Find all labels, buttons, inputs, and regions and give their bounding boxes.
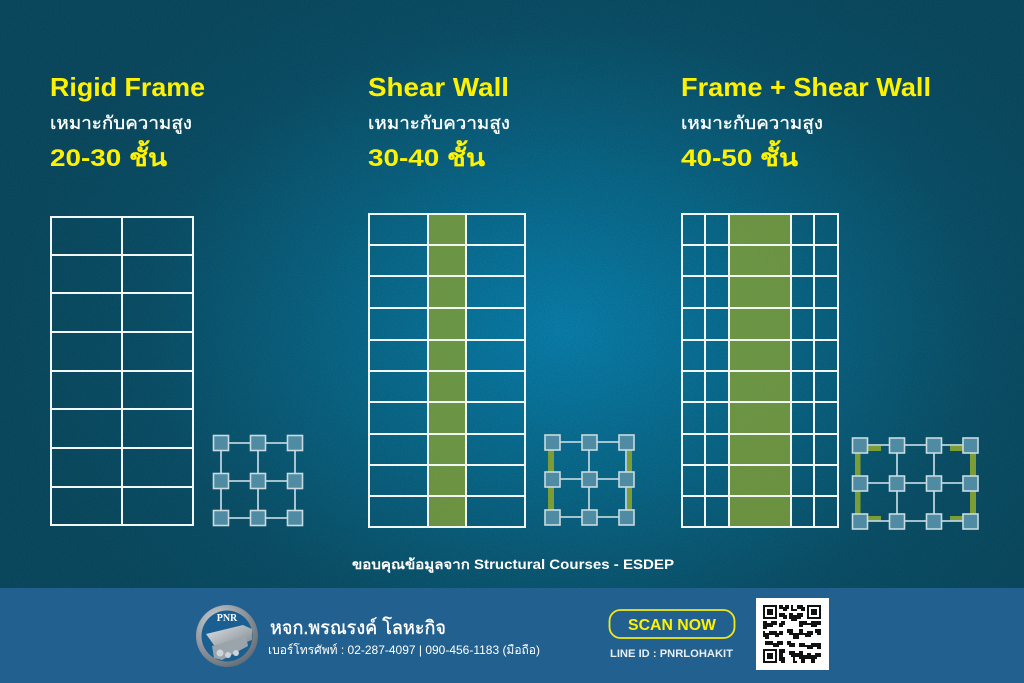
text: 20-30 floors: 20-30 ชั้น — [50, 139, 168, 172]
elevation grid: frame plus shear wall — [682, 214, 838, 527]
line id: LINE ID : PNRLOHAKIT — [610, 648, 733, 660]
icon: PNR logo — [196, 605, 258, 667]
panel: shear wall — [368, 72, 634, 527]
shear wall core — [428, 214, 466, 527]
elevation grid: rigid frame — [51, 217, 193, 525]
icon: PNR logo: PNR — [217, 613, 238, 624]
panel: frame plus shear wall — [681, 72, 978, 529]
plan: rigid frame — [214, 436, 302, 526]
text: suitable height label: เหมาะกับความสูง — [368, 113, 510, 134]
credit line: ขอบคุณข้อมูลจาก Structural Courses - ESDEP — [352, 557, 674, 573]
text: suitable height label: เหมาะกับความสูง — [681, 113, 823, 134]
text: 40-50 floors: 40-50 ชั้น — [681, 139, 799, 172]
button: scan now: SCAN NOW — [628, 617, 717, 634]
phone numbers: เบอร์โทรศัพท์ : 02-287-4097 | 090-456-1183 (มือถือ) — [268, 643, 540, 657]
text: suitable height label: เหมาะกับความสูง — [50, 113, 192, 134]
heading: Frame + Shear Wall: Frame + Shear Wall — [681, 72, 931, 102]
company name: หจก.พรณรงค์ โลหะกิจ — [270, 616, 446, 639]
QR code — [756, 598, 829, 670]
plan: shear wall — [545, 435, 634, 525]
plan: frame plus shear wall — [852, 438, 978, 529]
shear wall core — [729, 214, 791, 527]
heading: Shear Wall: Shear Wall — [368, 72, 509, 102]
elevation grid: shear wall — [369, 214, 525, 527]
panel: rigid frame — [50, 72, 302, 526]
text: 30-40 floors: 30-40 ชั้น — [368, 139, 486, 172]
footer band — [0, 588, 1024, 683]
heading: Rigid Frame: Rigid Frame — [50, 72, 205, 102]
button: scan now — [610, 610, 734, 638]
